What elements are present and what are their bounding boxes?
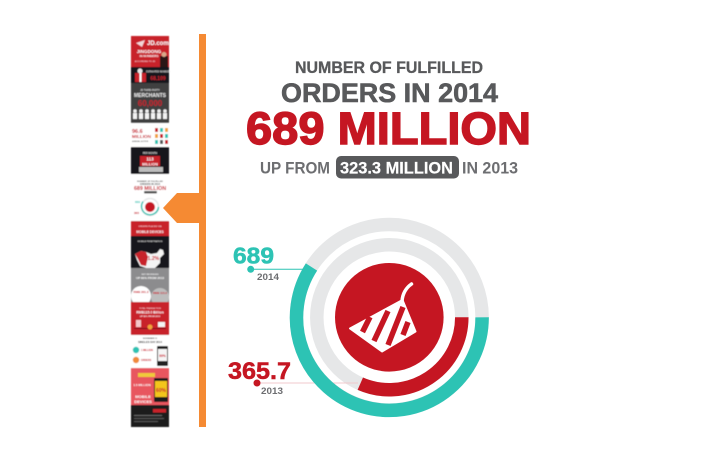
thumbnail section: merchants: JD THIRD-PARTY [140, 89, 160, 92]
thumbnail section: JD header [131, 36, 169, 67]
thumbnail section: merchants [131, 83, 169, 123]
thumbnail section: singles day: ORDERS [141, 359, 152, 362]
thumbnail section: employees: ESTIMATED NUMBER [146, 70, 170, 74]
thumbnail section: mobile devices: ORDERS PLACED VIA [138, 225, 162, 228]
thumbnail: full infographic overview [131, 36, 170, 427]
label: 689 in 2014: 689 [233, 242, 274, 268]
outer ring track [296, 224, 482, 410]
thumbnail section: monthly visits: MILLION [142, 162, 158, 166]
inner ring track [317, 245, 462, 390]
thumbnail section: gross merchandise: RMB 201.2 [133, 290, 149, 294]
label: 365.7 in 2013 [228, 358, 291, 397]
thumbnail section: monthly visits [131, 147, 169, 174]
thumbnail section: customers [132, 128, 168, 144]
thumbnail section: China map: MOBILE PENETRATION [138, 240, 163, 243]
thumbnail section: China map [131, 236, 169, 268]
thumbnail section: customers: ANNUAL ACTIVE [132, 140, 149, 143]
outer arc: 2014 [297, 267, 482, 410]
thumbnail section: mobile sales: 1.5 MILLION [133, 383, 151, 387]
thumbnail section: employees: 68,109 [150, 76, 166, 82]
inner arc: 2013 [360, 317, 462, 390]
thumbnail section: gross merchandise: NET REVENUES [141, 274, 159, 276]
thumbnail section: RMB total: UP 56% FROM 2013 [140, 316, 161, 318]
thumbnail section: mobile devices: MOBILE DEVICES [136, 230, 164, 234]
thumbnail section: mobile sales [131, 368, 169, 405]
thumbnail section: singles day [133, 338, 168, 366]
subheading: up from 323.3 million in 2013: 323.3 MILLION [340, 160, 453, 178]
label: 689 in 2014: 2014 [257, 272, 280, 283]
thumbnail section: fulfilled orders: 689 [135, 200, 140, 204]
label: 689 in 2014 [233, 242, 304, 283]
thumbnail section: mobile sales: 60% [156, 388, 167, 394]
thumbnail section: fulfilled orders: 365 [134, 211, 139, 215]
thumbnail section: mobile sales: MOBILE [135, 394, 151, 399]
heading: number of fulfilled: NUMBER OF FULFILLED [295, 58, 483, 77]
icon: shopping bag [350, 284, 416, 352]
thumbnail section: employees [131, 67, 170, 83]
thumbnail section: fulfilled orders: 689 MILLION [134, 186, 166, 192]
thumbnail section: fulfilled orders: ORDERS IN 2014 [140, 183, 161, 186]
thumbnail section: monthly visits: PER MONTH [143, 152, 157, 155]
center disc [335, 263, 444, 372]
subheading: up from 323.3 million in 2013: IN 2013 [462, 160, 518, 178]
thumbnail section: China map: 21.2% [145, 256, 160, 262]
subheading: up from 323.3 million in 2013: UP FROM [260, 160, 330, 178]
thumbnail section: mobile devices [131, 221, 169, 236]
label: 365.7 in 2013: 365.7 [228, 358, 291, 385]
thumbnail section: singles day: 1 MILLION [141, 349, 153, 352]
thumbnail section: singles day: SINGLES DAY 2014 [138, 340, 162, 344]
thumbnail section: JD header: JD.com [147, 41, 169, 47]
thumbnail section: merchants: 60,000 [138, 99, 163, 108]
ring chart: orders 2014 vs 2013 [257, 224, 482, 410]
thumbnail section: monthly visits: 113 [146, 156, 154, 162]
thumbnail section: fulfilled orders: NUMBER OF FULFILLED [137, 181, 163, 183]
orange timeline bar [199, 34, 206, 427]
leader line 2013 [257, 382, 358, 384]
thumbnail section: fulfilled orders [134, 181, 166, 216]
thumbnail section: JD header: ACCORDING TO JD [135, 60, 156, 63]
thumbnail section: RMB total: TOTAL TRANSACTION [139, 307, 161, 310]
thumbnail section: RMB total [131, 302, 169, 335]
subheading: up from 323.3 million in 2013 [260, 156, 518, 178]
thumbnail section: customers: MILLION [132, 134, 152, 139]
thumbnail section: RMB total: RMB115.0 Billion [136, 310, 164, 314]
thumbnail section: singles day: 60% [159, 354, 166, 358]
orange arrow pointer [163, 193, 200, 223]
heading: orders in 2014: ORDERS IN 2014 [281, 78, 498, 108]
thumbnail section: gross merchandise: UP 66% FROM 2013 [136, 276, 164, 280]
thumbnail section: JD header: IN NUMBERS [139, 54, 159, 58]
thumbnail section: customers: 96.6 [132, 129, 143, 135]
thumbnail section: mobile sales: DEVICES [134, 399, 152, 404]
thumbnail section: footer [131, 405, 169, 427]
headline number: 689 million: 689 MILLION [246, 103, 531, 154]
thumbnail section: gross merchandise: RMB 115.0 [153, 291, 167, 295]
thumbnail section: merchants: MERCHANTS [134, 93, 167, 99]
thumbnail section: gross merchandise [131, 268, 169, 306]
label: 365.7 in 2013: 2013 [261, 386, 283, 397]
thumbnail section: singles day: NOVEMBER 11 [143, 338, 158, 340]
thumbnail section: JD header: JINGDONG [137, 49, 162, 54]
